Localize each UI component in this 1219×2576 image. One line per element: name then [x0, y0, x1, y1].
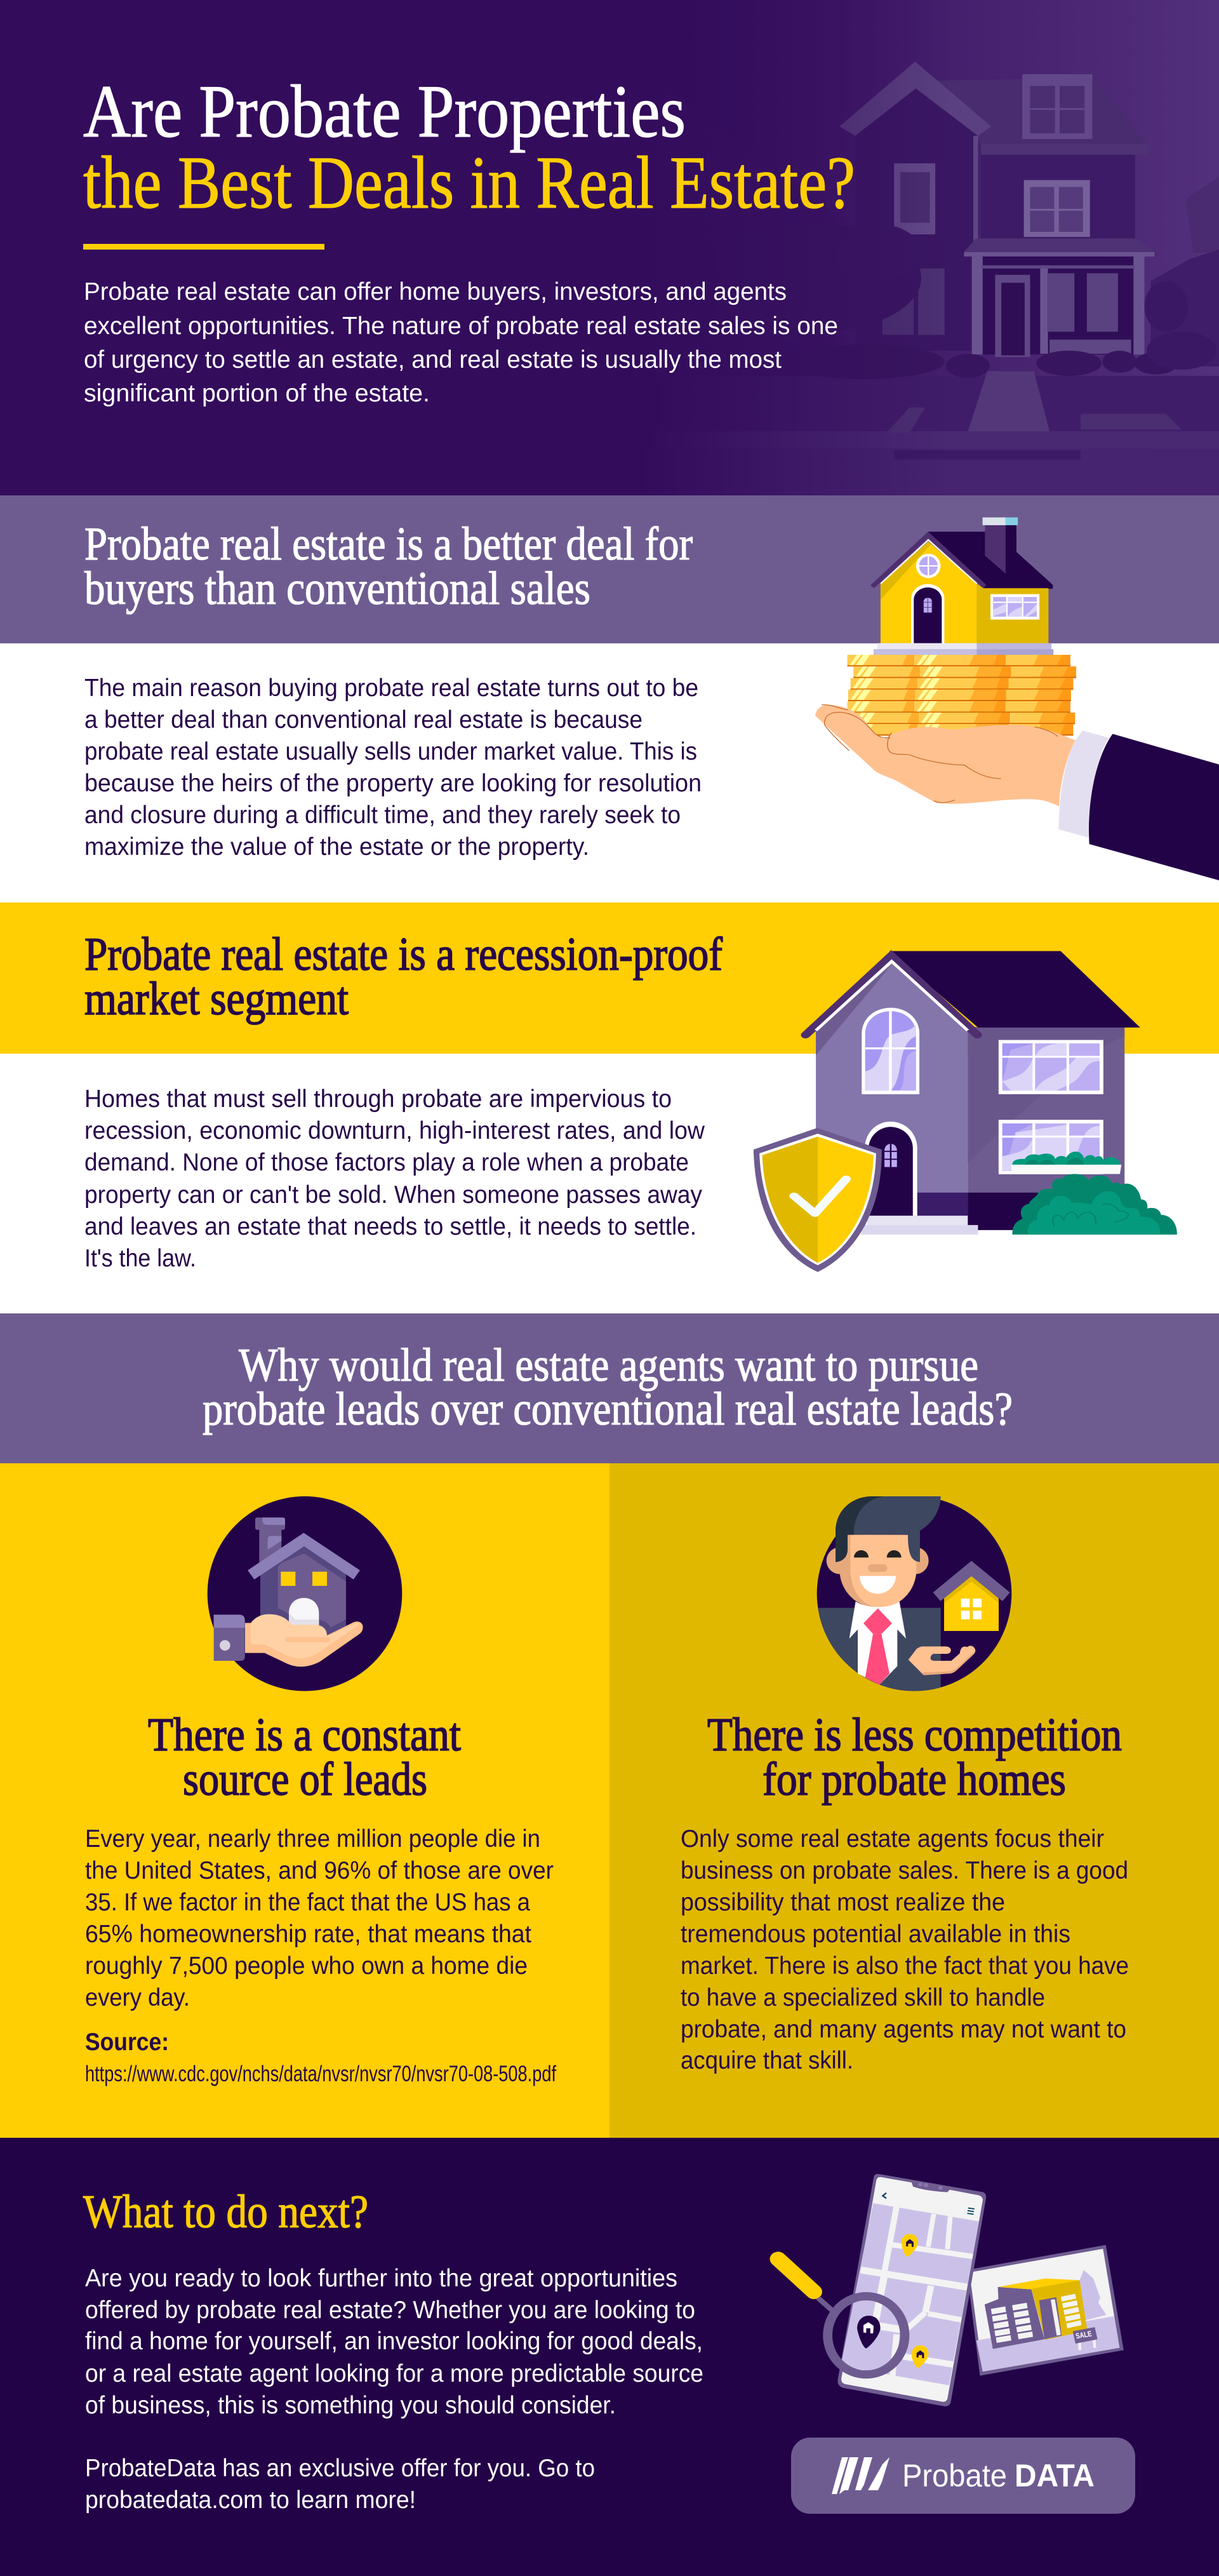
heading: better deal: Probate real estate is a better deal for — [84, 518, 693, 570]
logo: Probate Data — [791, 2438, 1135, 2514]
body text: better deal: probate real estate usually sells under market value. This is — [84, 738, 697, 765]
hero intro text — [84, 278, 838, 407]
logo mark — [832, 2457, 889, 2494]
body text: less competition: probate, and many agents may not want to — [681, 2016, 1126, 2043]
heading: constant source: source of leads — [183, 1754, 427, 1806]
body text: constant source: the United States, and 96% of those are over — [85, 1857, 554, 1884]
logo: Probate Data: Probate — [902, 2458, 1007, 2493]
panel: less competition — [610, 1463, 1219, 2138]
body text: less competition: acquire that skill. — [681, 2047, 853, 2074]
hero intro text: of urgency to settle an estate, and real estate is usually the most — [84, 346, 782, 373]
body text: recession-proof: Homes that must sell through probate are impervious to — [84, 1085, 672, 1113]
source citation: Source: — [85, 2029, 169, 2056]
call to action text: ProbateData has an exclusive offer for you. Go to — [85, 2455, 595, 2482]
body text: better deal: and closure during a difficult time, and they rarely seek to — [84, 802, 681, 829]
body text: less competition: tremendous potential available in this — [681, 1921, 1070, 1948]
hero accent bar — [83, 244, 324, 250]
heading: why pursue probate leads — [203, 1339, 1013, 1435]
hero title: Are Probate Properties — [83, 70, 686, 153]
body text: better deal: The main reason buying probate real estate turns out to be — [84, 674, 698, 702]
body text: what to do next — [85, 2265, 703, 2419]
heading: what to do next: What to do next? — [83, 2186, 368, 2238]
body text: less competition: Only some real estate agents focus their — [681, 1825, 1104, 1853]
body text: what to do next: Are you ready to look further into the great opportunities — [85, 2265, 677, 2292]
heading: less competition: for probate homes — [763, 1754, 1066, 1806]
heading: less competition — [707, 1709, 1122, 1806]
hero intro text: excellent opportunities. The nature of probate real estate sales is one — [84, 312, 838, 340]
panel: better deal for buyers — [0, 495, 1219, 902]
body text: recession-proof: recession, economic downturn, high-interest rates, and low — [84, 1117, 705, 1144]
body text: better deal: a better deal than conventional real estate is because — [84, 706, 643, 734]
heading: recession-proof: Probate real estate is a recession-proof — [84, 929, 723, 981]
body text: recession-proof: and leaves an estate that needs to settle, it needs to settle. — [84, 1213, 696, 1240]
body text: constant source: Every year, nearly three million people die in — [85, 1825, 540, 1853]
heading: recession-proof — [84, 929, 723, 1025]
icon: house with shield — [754, 951, 1177, 1272]
body text: what to do next: find a home for yourself, an investor looking for good deals, — [85, 2328, 703, 2355]
logo: Probate Data: DATA — [1015, 2458, 1095, 2493]
hero intro text: Probate real estate can offer home buyers, investors, and agents — [84, 278, 787, 305]
body text: less competition: market. There is also the fact that you have — [681, 1952, 1129, 1980]
panel: constant source of leads — [0, 1463, 610, 2138]
body text: what to do next: of business, this is something you should consider. — [85, 2392, 616, 2419]
body text: better deal: because the heirs of the property are looking for resolution — [84, 770, 702, 797]
heading: recession-proof: market segment — [84, 973, 349, 1025]
body text: constant source: 35. If we factor in the fact that the US has a — [85, 1889, 530, 1916]
panel: hero — [0, 0, 1219, 495]
heading: constant source: There is a constant — [148, 1709, 461, 1761]
body text: recession-proof: It's the law. — [84, 1245, 196, 1272]
heading: why pursue probate leads: probate leads over conventional real estate leads? — [203, 1383, 1013, 1435]
body text: what to do next: or a real estate agent looking for a more predictable source — [85, 2360, 703, 2387]
body text: recession-proof: demand. None of those factors play a role when a probate — [84, 1149, 689, 1176]
body text: constant source: roughly 7,500 people who own a home die — [85, 1952, 528, 1980]
hero intro text: significant portion of the estate. — [84, 380, 430, 407]
icon: phone with map — [778, 2174, 986, 2406]
body text: less competition — [681, 1825, 1129, 2074]
call to action text — [85, 2455, 595, 2514]
body text: constant source: every day. — [85, 1984, 190, 2011]
panel: why pursue probate leads — [0, 1313, 1219, 1463]
source citation — [85, 2029, 556, 2086]
panel: recession-proof — [0, 902, 1219, 1313]
body text: better deal — [84, 674, 702, 861]
icon: smiling agent with house — [815, 1496, 1011, 1693]
hero house photo — [645, 62, 1219, 495]
body text: better deal: maximize the value of the estate or the property. — [84, 833, 589, 861]
body text: less competition: business on probate sales. There is a good — [681, 1857, 1128, 1884]
icon: hand holding house on coins — [815, 518, 1219, 880]
heading: constant source — [148, 1709, 461, 1806]
heading: why pursue probate leads: Why would real estate agents want to pursue — [239, 1339, 978, 1392]
hero title — [83, 70, 855, 224]
panel: what to do next — [0, 2138, 1219, 2576]
body text: constant source: 65% homeownership rate, that means that — [85, 1921, 531, 1948]
call to action text: probatedata.com to learn more! — [85, 2486, 416, 2514]
heading: better deal — [84, 518, 693, 615]
hero title: the Best Deals in Real Estate? — [83, 141, 855, 224]
body text: recession-proof — [84, 1085, 705, 1272]
icon: shield with check — [754, 1128, 882, 1272]
body text: constant source — [85, 1825, 554, 2011]
icon: hand holding house in circle — [208, 1496, 402, 1691]
icon: listing photo card: SALE — [1075, 2329, 1093, 2340]
heading: better deal: buyers than conventional sales — [84, 563, 590, 615]
body text: recession-proof: property can or can't be sold. When someone passes away — [84, 1181, 702, 1209]
body text: less competition: to have a specialized skill to handle — [681, 1984, 1045, 2011]
body text: less competition: possibility that most realize the — [681, 1889, 1005, 1916]
heading: less competition: There is less competition — [707, 1709, 1122, 1761]
body text: what to do next: offered by probate real estate? Whether you are looking to — [85, 2297, 695, 2324]
source citation: https://www.cdc.gov/nchs/data/nvsr/nvsr70/nvsr70-08-508.pdf — [85, 2062, 556, 2086]
icon: listing photo card — [967, 2245, 1124, 2376]
